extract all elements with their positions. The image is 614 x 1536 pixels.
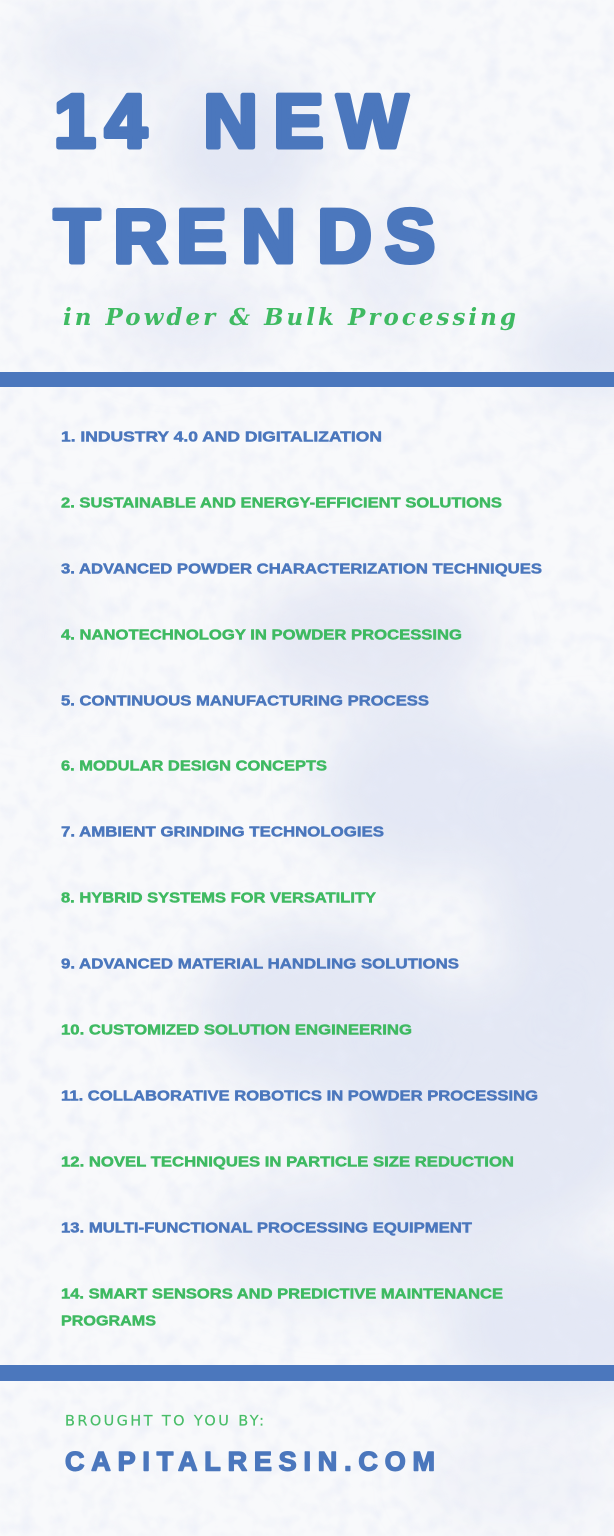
item 4: 4. NANOTECHNOLOGY IN POWDER PROCESSING [61,626,462,644]
item 14 [61,1286,503,1330]
top divider bar [0,372,614,387]
item 12: 12. NOVEL TECHNIQUES IN PARTICLE SIZE REDUCTION [61,1154,514,1170]
subtitle: in Powder & Bulk Processing [63,304,516,331]
item 8: 8. HYBRID SYSTEMS FOR VERSATILITY [61,890,376,906]
item 14: PROGRAMS [61,1312,156,1330]
item 6: 6. MODULAR DESIGN CONCEPTS [61,758,327,774]
item 11: 11. COLLABORATIVE ROBOTICS IN POWDER PROCESSING [61,1088,538,1104]
item 2: 2. SUSTAINABLE AND ENERGY-EFFICIENT SOLUTIONS [61,494,502,512]
item 9: 9. ADVANCED MATERIAL HANDLING SOLUTIONS [61,956,459,972]
item 10: 10. CUSTOMIZED SOLUTION ENGINEERING [61,1022,412,1038]
item 7: 7. AMBIENT GRINDING TECHNOLOGIES [61,824,384,840]
item 13: 13. MULTI-FUNCTIONAL PROCESSING EQUIPMENT [61,1220,472,1236]
attribution label: BROUGHT TO YOU BY: [65,1414,264,1430]
item 3: 3. ADVANCED POWDER CHARACTERIZATION TECHNIQUES [61,560,542,578]
item 5: 5. CONTINUOUS MANUFACTURING PROCESS [61,692,429,710]
title: TRENDS [54,194,435,278]
website name: CAPITALRESIN.COM [65,1446,435,1476]
item 14: 14. SMART SENSORS AND PREDICTIVE MAINTENANCE [61,1286,503,1302]
trends list [61,428,542,1330]
title: 14 NEW [54,79,408,163]
title [54,79,435,278]
bottom divider bar [0,1365,614,1381]
item 1: 1. INDUSTRY 4.0 AND DIGITALIZATION [61,428,382,446]
